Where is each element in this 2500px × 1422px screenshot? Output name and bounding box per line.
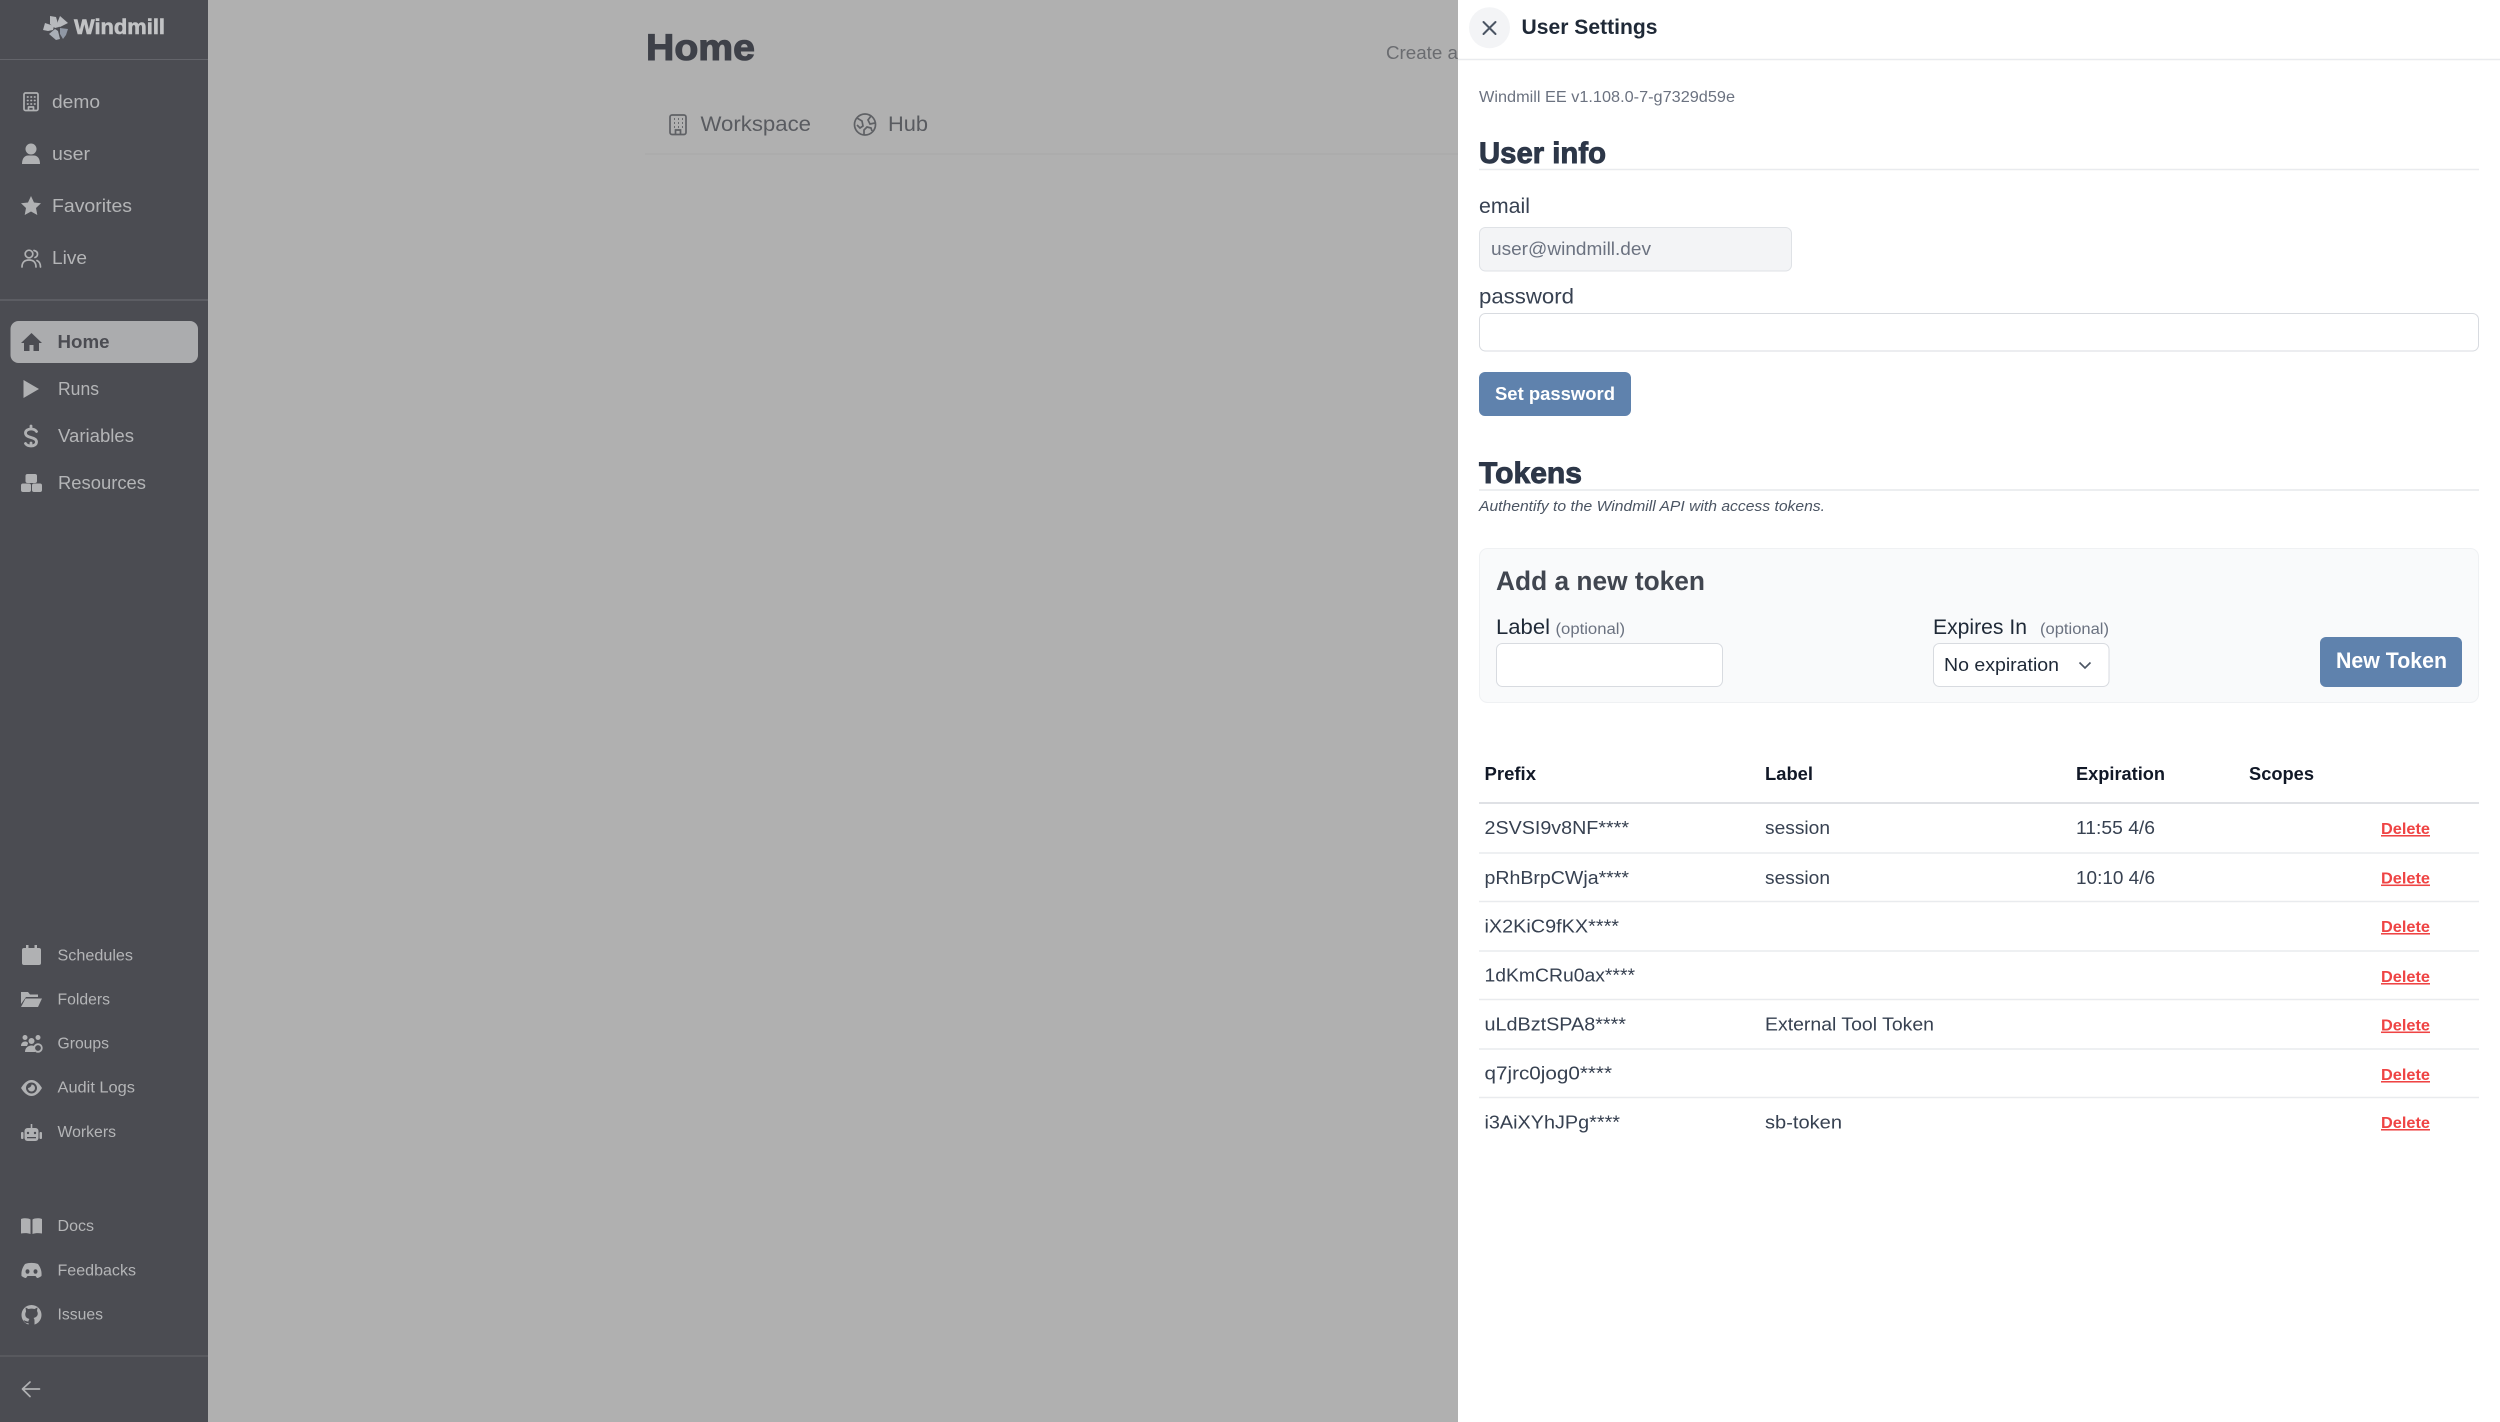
table header: Expiration xyxy=(2076,764,2165,784)
button: set password: Set password xyxy=(1495,384,1615,404)
nav item: Home active xyxy=(10,321,198,363)
row 4: Delete xyxy=(2381,969,2430,986)
row 2: pRhBrpCWja**** xyxy=(1484,867,1629,888)
icon: workspace building xyxy=(670,115,686,134)
label: password: password xyxy=(1479,286,1574,308)
icon: resources cubes xyxy=(21,474,42,492)
icon: hub globe xyxy=(854,114,876,135)
row 1: 2SVSI9v8NF**** xyxy=(1484,817,1629,838)
nav item: Live: Live xyxy=(52,247,87,268)
row 3: Delete xyxy=(2381,919,2430,936)
nav item: Issues: Issues xyxy=(58,1306,103,1324)
icon: play xyxy=(24,380,39,398)
icon: robot xyxy=(21,1124,42,1141)
version text: Windmill EE v1.108.0-7-g7329d59e xyxy=(1479,89,1735,106)
row 2 xyxy=(1484,867,2430,888)
row 6: q7jrc0jog0**** xyxy=(1484,1062,1612,1084)
panel: sidebar xyxy=(0,0,208,1422)
close button xyxy=(1469,7,1510,48)
table: tokens xyxy=(1479,764,2479,1132)
icon: docs book xyxy=(21,1218,42,1234)
select: expiration: No expiration xyxy=(1944,654,2059,675)
main background panel xyxy=(208,0,1459,1422)
tab: Workspace: Workspace xyxy=(700,113,811,136)
row 2: 10:10 4/6 xyxy=(2076,867,2155,888)
row 1 xyxy=(1484,817,2430,838)
row 6: Delete xyxy=(2381,1067,2430,1084)
row 3 xyxy=(1484,916,2430,936)
row 7: sb-token xyxy=(1765,1112,1842,1132)
panel: user settings drawer xyxy=(1458,0,2500,1422)
label: Home: Home xyxy=(58,332,110,352)
table header: Label xyxy=(1765,764,1813,784)
icon: windmill logo xyxy=(43,16,68,40)
icon: live users xyxy=(22,250,40,267)
row 4: 1dKmCRu0ax**** xyxy=(1484,964,1635,986)
row 5: External Tool Token xyxy=(1765,1014,1934,1034)
row 1: Delete xyxy=(2381,821,2430,838)
card heading: Add a new token xyxy=(1496,566,1705,596)
nav item: Favorites: Favorites xyxy=(52,195,132,216)
icon: eye xyxy=(21,1080,42,1096)
table header xyxy=(1484,764,2314,784)
row 1: 11:55 4/6 xyxy=(2076,817,2155,838)
icon: home xyxy=(21,333,42,351)
tokens description: Authentify to the Windmill API with access tokens. xyxy=(1478,498,1825,515)
brand: Windmill: Windmill xyxy=(74,16,165,39)
row 1: session xyxy=(1765,817,1830,838)
icon: building xyxy=(24,93,38,110)
nav item: Groups: Groups xyxy=(58,1036,109,1052)
expires caption xyxy=(1933,616,2109,639)
row 5: uLdBztSPA8**** xyxy=(1484,1014,1626,1034)
icon: discord xyxy=(21,1263,42,1278)
icon: dollar xyxy=(26,426,36,446)
button: new token: New Token xyxy=(2336,648,2447,673)
row 4 xyxy=(1484,964,2430,986)
heading: Tokens: Tokens xyxy=(1479,457,1582,490)
label field caption: (optional) xyxy=(1556,621,1625,638)
row 7 xyxy=(1484,1112,2430,1132)
nav item: Runs: Runs xyxy=(58,379,99,399)
icon: star xyxy=(21,196,41,215)
page title: Home: Home xyxy=(646,27,755,68)
label field caption: Label xyxy=(1496,616,1550,639)
row 6 xyxy=(1484,1062,2430,1084)
expires caption: Expires In xyxy=(1933,616,2027,639)
heading: User info: User info xyxy=(1479,137,1606,170)
button: new token xyxy=(2320,637,2462,687)
icon: folder xyxy=(21,992,42,1007)
label field caption xyxy=(1496,616,1625,639)
expires caption: (optional) xyxy=(2040,621,2109,638)
nav item: Feedbacks: Feedbacks xyxy=(58,1262,136,1280)
input: password xyxy=(1480,314,2478,351)
table header: Scopes xyxy=(2249,764,2314,784)
row 7: i3AiXYhJPg**** xyxy=(1484,1112,1620,1132)
icon: github xyxy=(22,1305,42,1325)
row 5: Delete xyxy=(2381,1018,2430,1034)
nav item: Variables: Variables xyxy=(58,426,134,446)
nav item: Docs: Docs xyxy=(58,1218,94,1235)
nav item: Resources: Resources xyxy=(58,473,146,493)
truncated create text: Create a xyxy=(1386,43,1459,63)
icon: back arrow xyxy=(22,1382,40,1396)
select: expiration xyxy=(1934,644,2109,686)
icon: user xyxy=(22,144,40,164)
row 7: Delete xyxy=(2381,1115,2430,1132)
nav item: Folders: Folders xyxy=(58,992,110,1008)
nav item: user: user xyxy=(52,143,90,164)
input: email: user@windmill.dev xyxy=(1491,238,1652,259)
input: email xyxy=(1480,228,1792,271)
nav item: Audit Logs: Audit Logs xyxy=(58,1080,135,1096)
row 2: session xyxy=(1765,867,1830,888)
card: add a new token xyxy=(1480,548,2478,702)
nav item: Workers: Workers xyxy=(58,1124,116,1141)
row 2: Delete xyxy=(2381,870,2430,888)
icon: groups xyxy=(21,1035,42,1052)
input: token label xyxy=(1496,644,1722,686)
row 3: iX2KiC9fKX**** xyxy=(1484,916,1619,936)
label: email: email xyxy=(1479,195,1530,218)
nav item: Schedules: Schedules xyxy=(58,948,133,964)
drawer title: User Settings xyxy=(1522,16,1658,39)
button: set password xyxy=(1479,372,1631,416)
icon: calendar xyxy=(22,945,41,965)
row 5 xyxy=(1484,1014,2430,1034)
nav item: demo: demo xyxy=(52,91,100,112)
tab: Hub: Hub xyxy=(888,113,928,136)
table header: Prefix xyxy=(1484,764,1536,784)
